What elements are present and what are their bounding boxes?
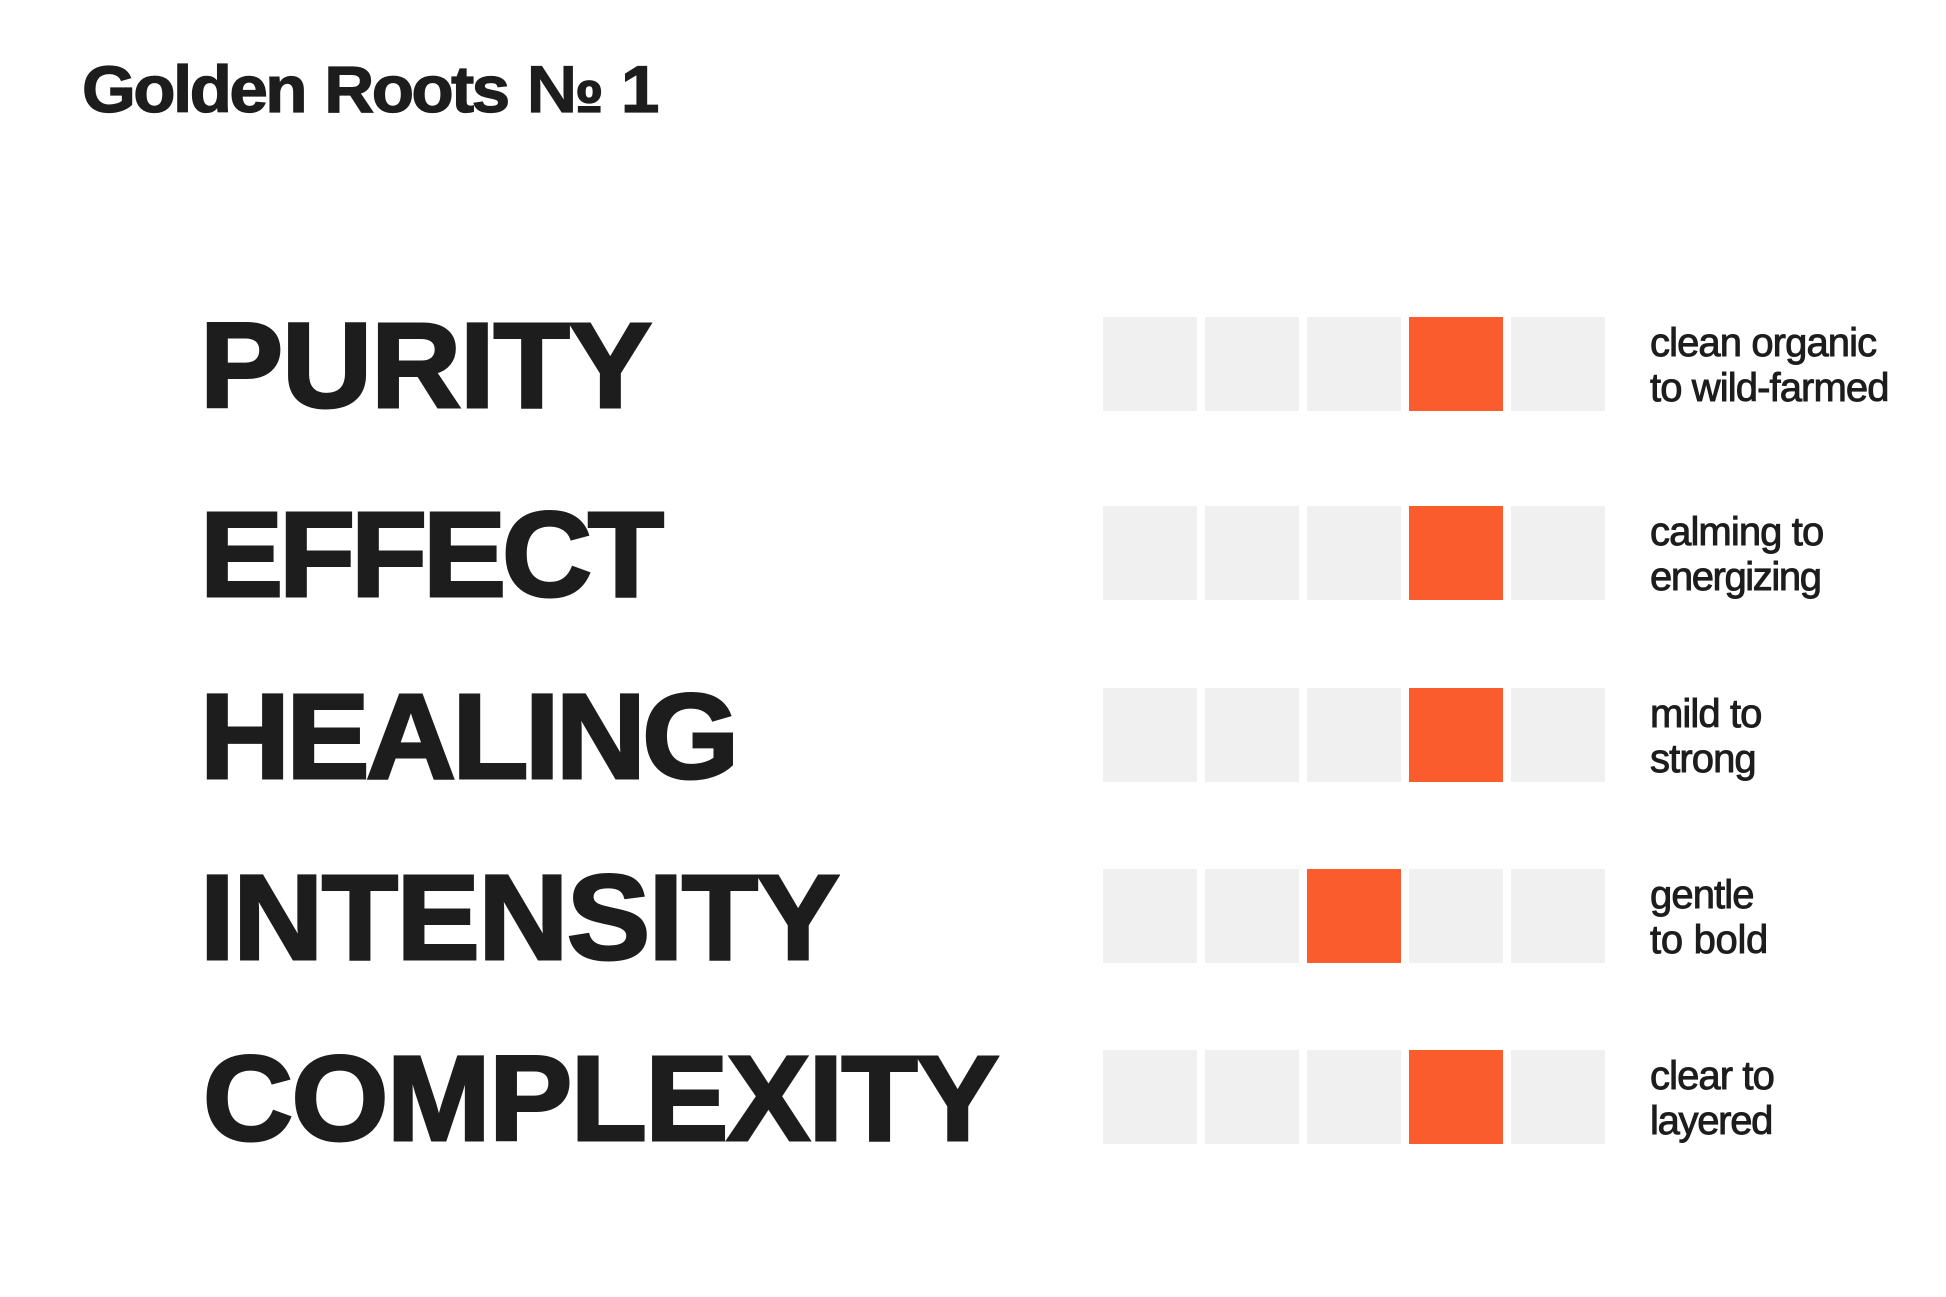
description: purity: to wild-farmed <box>1650 366 1889 410</box>
label: purity: PURITY <box>200 297 651 433</box>
description: healing: strong <box>1650 737 1756 781</box>
description: complexity: layered <box>1650 1099 1772 1143</box>
description: complexity <box>1650 1054 1774 1143</box>
description: healing: mild to <box>1650 692 1762 736</box>
row: intensity <box>200 849 1768 985</box>
rating scale: complexity, 4 of 5 <box>1103 1050 1605 1144</box>
rating scale: effect, 4 of 5 <box>1103 506 1605 600</box>
description: intensity: to bold <box>1650 918 1768 962</box>
row: healing <box>200 668 1762 804</box>
description: effect <box>1650 510 1823 599</box>
row: purity <box>200 297 1889 433</box>
rating scale: healing, 4 of 5 <box>1103 688 1605 782</box>
description: intensity <box>1650 873 1768 962</box>
label: effect: EFFECT <box>200 486 660 622</box>
description: purity: clean organic <box>1650 321 1876 365</box>
row: effect <box>200 486 1823 622</box>
label: complexity: COMPLEXITY <box>202 1030 997 1166</box>
description: effect: energizing <box>1650 555 1821 599</box>
rating scale: intensity, 3 of 5 <box>1103 869 1605 963</box>
rating scale: purity, 4 of 5 <box>1103 317 1605 411</box>
title: Golden Roots № 1 <box>82 52 657 126</box>
row: complexity <box>202 1030 1774 1166</box>
description: healing <box>1650 692 1762 781</box>
description: intensity: gentle <box>1650 873 1754 917</box>
label: intensity: INTENSITY <box>200 849 839 985</box>
description: effect: calming to <box>1650 510 1823 554</box>
label: healing: HEALING <box>200 668 736 804</box>
description: complexity: clear to <box>1650 1054 1774 1098</box>
description: purity <box>1650 321 1889 410</box>
